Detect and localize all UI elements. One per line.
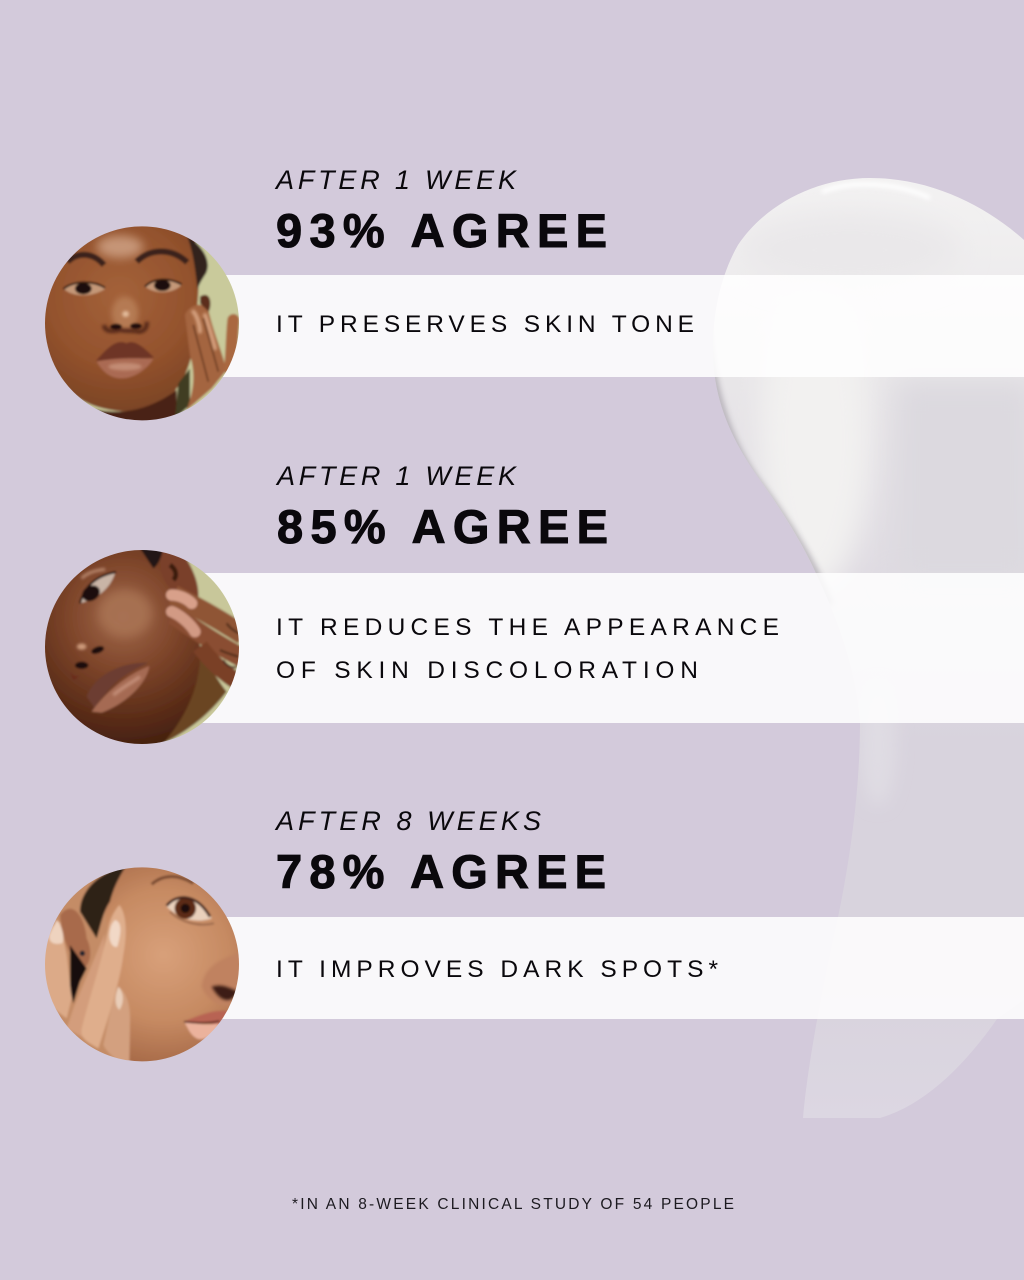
white bar 2 (200, 573, 1024, 723)
statistic 2: 85% AGREE (277, 500, 608, 553)
photo: man touching jaw, result 2 (45, 550, 239, 744)
statistic 3: 78% AGREE (276, 845, 606, 898)
white bar 3 (200, 917, 1024, 1019)
claim 2: OF SKIN DISCOLORATION (276, 657, 698, 684)
timeframe 1: AFTER 1 WEEK (274, 165, 517, 195)
photo: woman touching cheek, result 1 (45, 226, 239, 420)
photo: woman touching temple, result 3 (45, 867, 239, 1062)
statistic 1: 93% AGREE (276, 204, 607, 257)
timeframe 3: AFTER 8 WEEKS (274, 806, 541, 836)
claim 2: IT REDUCES THE APPEARANCE (276, 614, 779, 641)
claim 3: IT IMPROVES DARK SPOTS* (276, 956, 718, 983)
timeframe 2: AFTER 1 WEEK (275, 461, 517, 491)
result 1 heading (274, 165, 607, 257)
footnote: *IN AN 8-WEEK CLINICAL STUDY OF 54 PEOPLE (292, 1196, 734, 1213)
cream swatch (700, 170, 1024, 1130)
claim 2 (276, 614, 779, 684)
result 2 heading (275, 461, 608, 553)
white bar 1 (200, 275, 1024, 377)
result 3 heading (274, 806, 606, 898)
claim 1: IT PRESERVES SKIN TONE (276, 311, 694, 338)
